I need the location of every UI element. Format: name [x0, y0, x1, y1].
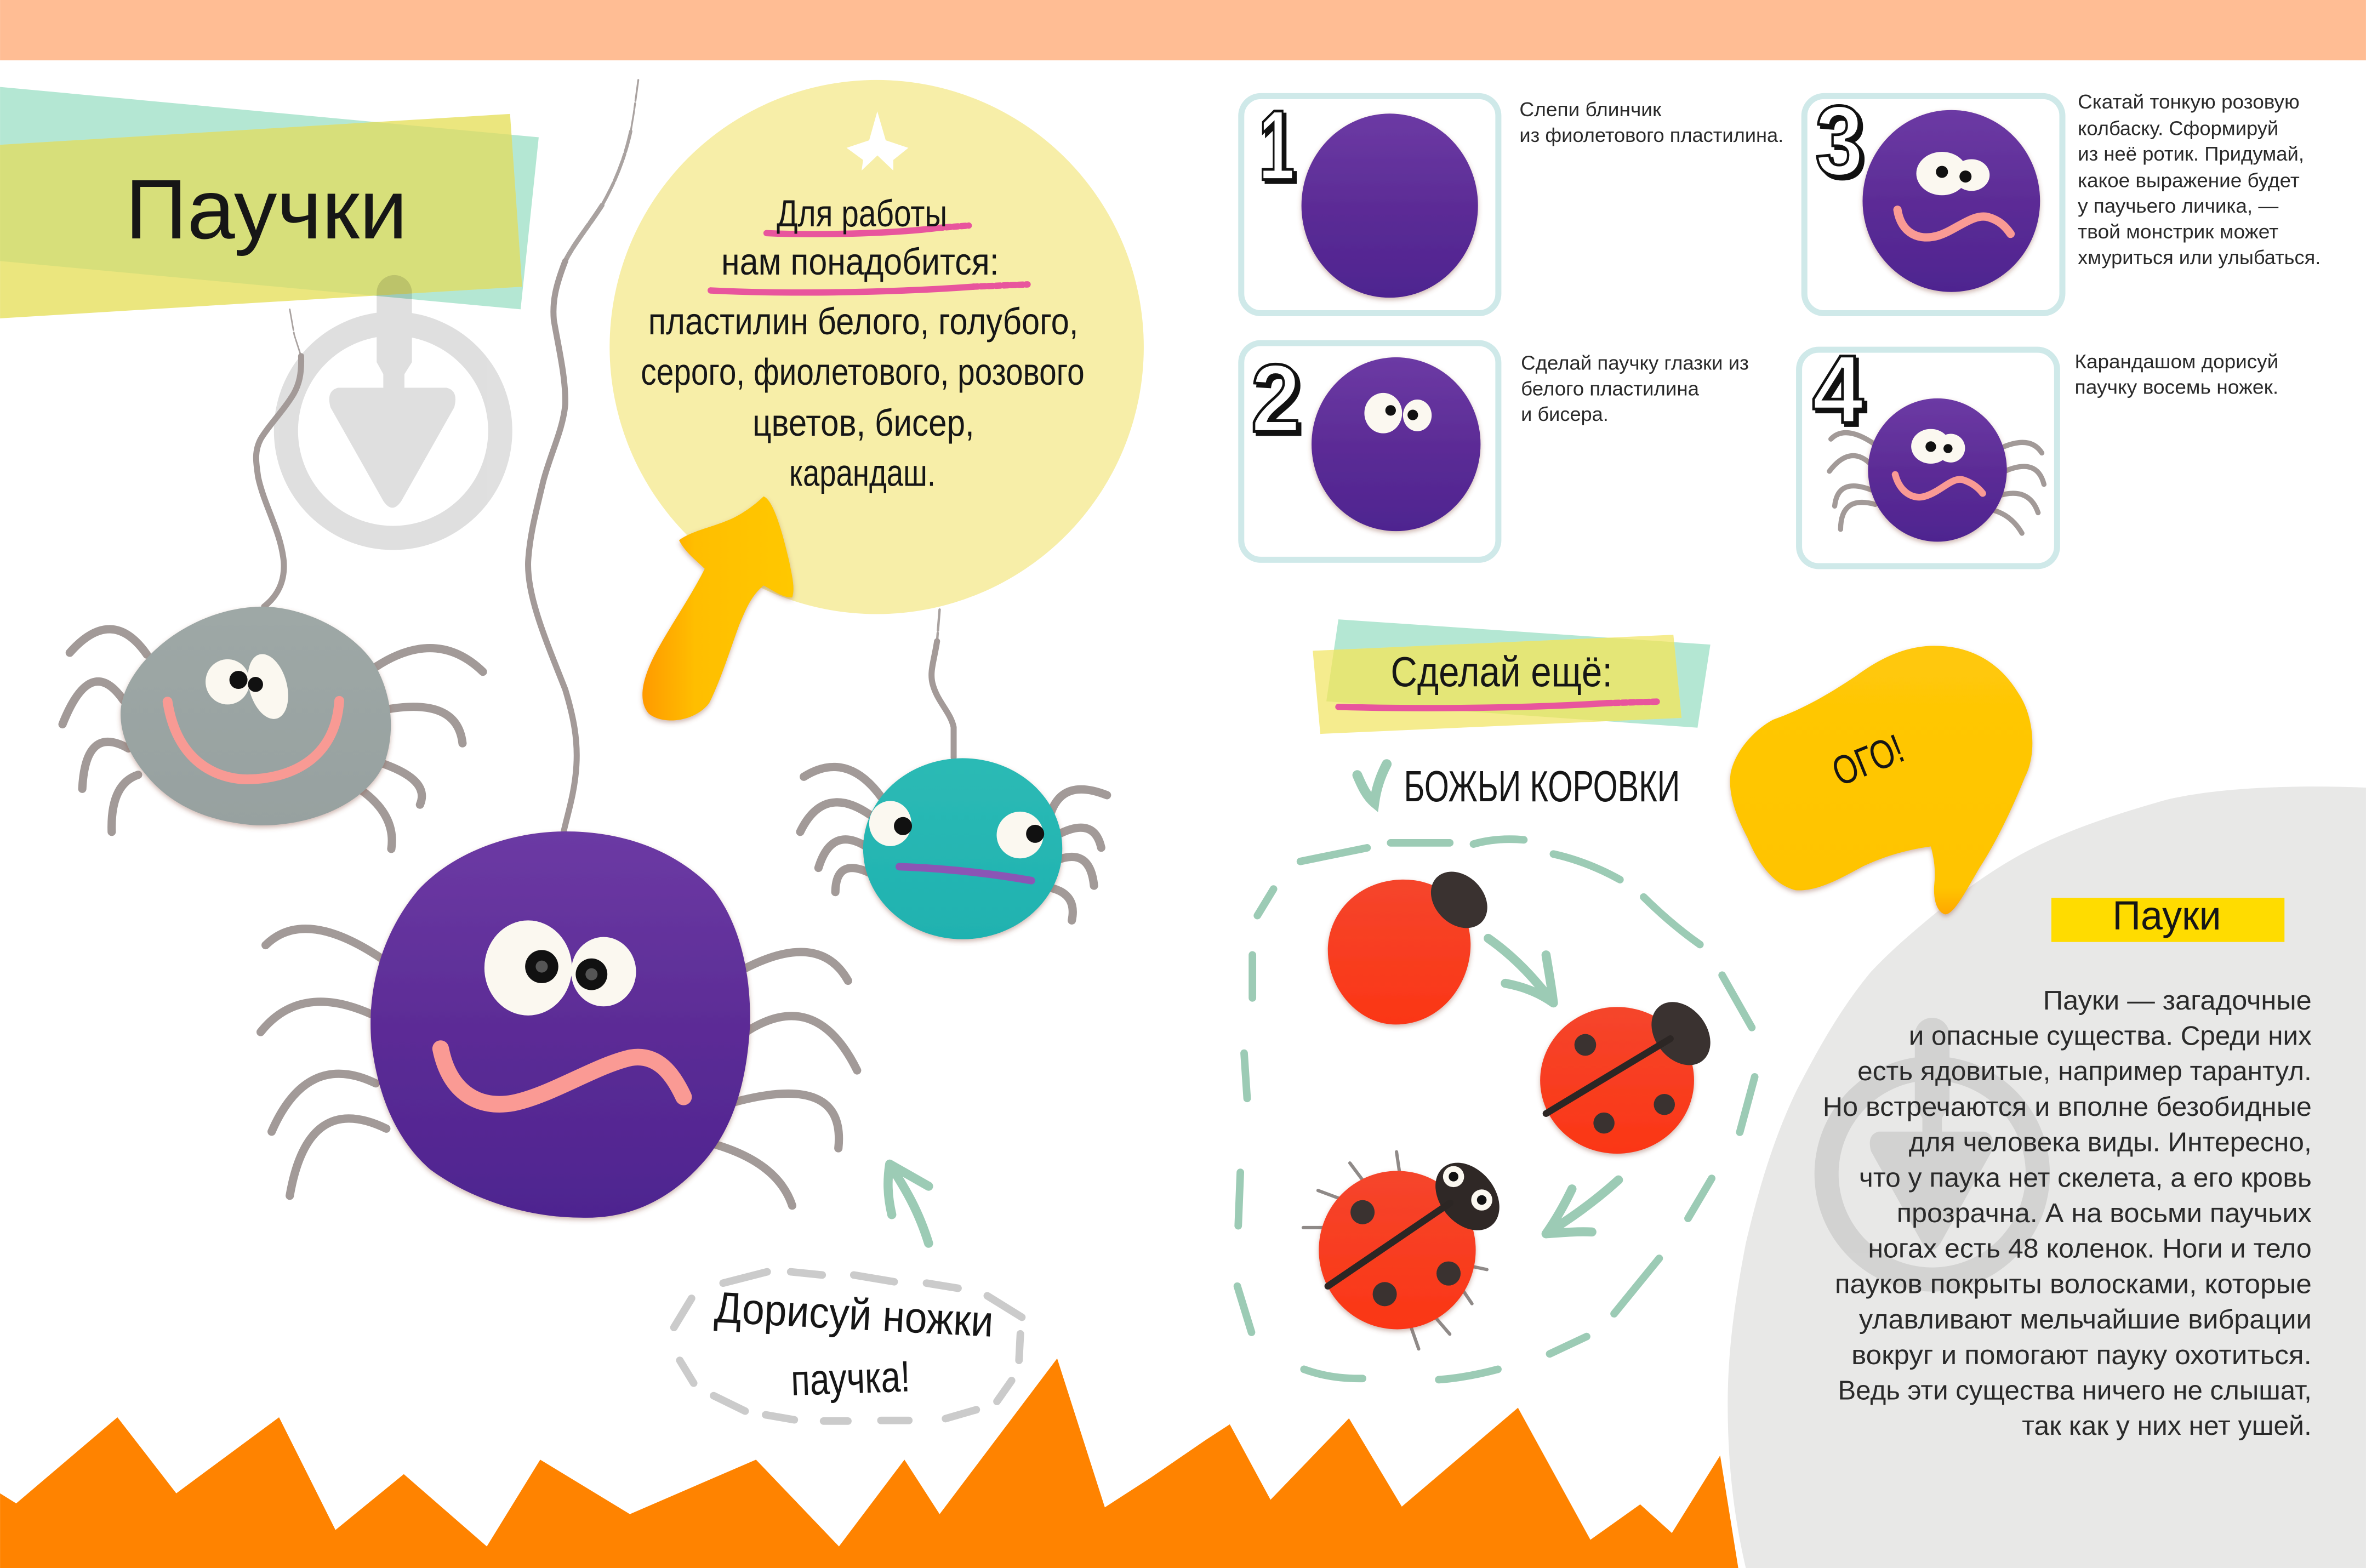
step 2 text: и бисера. [1521, 403, 1609, 425]
text block: spider facts: улавливают мельчайшие вибрации [1859, 1304, 2312, 1335]
ladybug 1 body [1328, 880, 1470, 1024]
step 3 text: из неё ротик. Придумай, [2078, 143, 2304, 165]
dashed ring [1238, 839, 1755, 1379]
panel: step 4 [1799, 335, 2057, 566]
step 3 text: Скатай тонкую розовую [2078, 91, 2300, 113]
thread: teal spider [932, 609, 954, 757]
ribbon underline fade [1607, 702, 1657, 703]
text block: spider facts: прозрачна. А на восьми паучьих [1897, 1198, 2312, 1228]
text block: spider facts: Но встречаются и вполне безобидные [1823, 1091, 2312, 1122]
step 3 text: колбаску. Сформируй [2078, 117, 2278, 139]
ladybug 3 spots [1350, 1200, 1461, 1306]
step 2 disc [1312, 357, 1480, 531]
step 3 eyes [1916, 152, 1989, 195]
teal spider legs [800, 767, 1107, 920]
arrow: green up to spider [888, 1164, 928, 1244]
step 2 number: 2 [1251, 344, 1301, 452]
thread: grey spider [256, 309, 301, 607]
step 3 text [2078, 91, 2321, 269]
panel: materials circle [609, 80, 1144, 614]
pink underline 1 fade [939, 226, 969, 228]
panel: step 3 [1804, 85, 2062, 313]
teal spider mouth [899, 866, 1031, 881]
panel: step 1 [1241, 90, 1498, 313]
purple spider mouth [441, 1048, 683, 1104]
pink underline 2 [711, 287, 973, 293]
materials list line 1: пластилин белого, голубого, [648, 300, 1078, 343]
purple spider legs [261, 929, 857, 1206]
step 3 text: хмуриться или улыбаться. [2078, 247, 2321, 269]
text block: spider facts [1823, 985, 2312, 1441]
grey spider legs [62, 629, 483, 849]
step 4 disc [1868, 398, 2007, 541]
bubble text: ОГО! [1826, 726, 1910, 795]
ladybug 2 line [1546, 1039, 1671, 1114]
text block: spider facts: есть ядовитые, например тарантул. [1857, 1056, 2312, 1086]
title: Паучки [126, 162, 407, 256]
ladybug 2 body [1540, 1007, 1694, 1154]
dashed oval [674, 1272, 1022, 1421]
top band [0, 0, 2366, 60]
ladybugs heading: БОЖЬИ КОРОВКИ [1404, 762, 1680, 811]
ladybug 1 [1328, 860, 1498, 1024]
purple spider eyes [484, 920, 636, 1016]
arrow: yellow clay [642, 497, 794, 720]
step 4 mouth [1895, 475, 1983, 497]
ladybug 3 line [1328, 1203, 1450, 1286]
step 3 mouth [1897, 210, 2011, 237]
step 3 text: у паучьего личика, — [2078, 195, 2278, 217]
step 4 number: 4 [1815, 338, 1867, 446]
grey spider mouth [168, 701, 339, 779]
step 3 text: какое выражение будет [2078, 169, 2300, 191]
materials heading line 1: Для работы [777, 192, 947, 235]
text block: spider facts: Ведь эти существа ничего не слышат, [1838, 1375, 2312, 1405]
grey spider eyes [206, 649, 295, 723]
step 3 disc [1862, 110, 2040, 292]
text block: spider facts: ногах есть 48 коленок. Ноги и тело [1868, 1233, 2312, 1264]
text block: spider facts: для человека виды. Интересно, [1909, 1127, 2312, 1158]
materials heading line 2: нам понадобится: [721, 241, 999, 283]
step 3 number: 3 [1818, 88, 1867, 199]
ladybug 2 spots [1575, 1034, 1675, 1133]
title ribbon [0, 87, 539, 318]
orange zigzag ground [0, 1359, 1738, 1568]
step 2 text: Сделай паучку глазки из [1521, 352, 1749, 374]
callout: draw the legs [674, 1272, 1022, 1421]
text block: spider facts: пауков покрыты волосками, которые [1835, 1268, 2312, 1299]
pink underline 2 fade [973, 284, 1028, 287]
thread: purple spider [528, 80, 638, 831]
step 3 text: твой монстрик может [2078, 221, 2278, 243]
label: spiders [2051, 893, 2284, 942]
step 1 number: 1 [1258, 90, 1295, 201]
step 4 text: Карандашом дорисуй [2075, 351, 2278, 373]
teal spider eyes [869, 801, 1044, 858]
grey fact panel background [1728, 786, 2366, 1568]
speech bubble: wow [1730, 646, 2032, 914]
icon: download watermark on panel [1815, 1018, 2050, 1292]
step 2 eyes [1364, 393, 1432, 434]
ladybug 3 head [1422, 1150, 1513, 1243]
ladybug 1 head [1419, 860, 1498, 939]
step 1 disc [1302, 113, 1478, 298]
step 1 number: 1 [1262, 93, 1298, 204]
ladybug 3 legs [1303, 1152, 1487, 1349]
step 2 text: белого пластилина [1521, 378, 1699, 400]
icon: star [847, 111, 908, 170]
text block: spider facts: Пауки — загадочные [2043, 985, 2312, 1016]
purple spider body [370, 831, 750, 1218]
ladybug 3 [1303, 1150, 1513, 1349]
arrow: ladybug 1 to 2 [1488, 938, 1553, 1003]
icon: download watermark [274, 275, 512, 550]
step 1 text: из фиолетового пластилина. [1519, 124, 1783, 146]
ribbon text: Сделай ещё: [1390, 649, 1612, 696]
step 4 number: 4 [1812, 335, 1863, 443]
materials list line 2: серого, фиолетового, розового [641, 351, 1085, 393]
icon: check mark [1357, 764, 1387, 803]
teal spider body [863, 758, 1062, 939]
pink underline 1 [767, 228, 939, 234]
text block: spider facts: вокруг и помогают пауку охотиться. [1851, 1339, 2312, 1370]
step 4 text [2075, 351, 2278, 398]
materials list line 4: карандаш. [789, 452, 936, 494]
callout text line 2: паучка! [790, 1352, 911, 1405]
ladybug 3 body [1319, 1171, 1476, 1329]
label text: Пауки [2112, 893, 2221, 938]
step 4 legs [1829, 433, 2044, 533]
spider: teal [800, 758, 1107, 939]
panel: step 2 [1241, 343, 1498, 560]
ribbon underline [1338, 703, 1607, 708]
ribbon: make more [1313, 619, 1711, 734]
callout text line 1: Дорисуй ножки [714, 1282, 995, 1346]
step 3 number: 3 [1815, 85, 1863, 196]
materials list line 3: цветов, бисер, [752, 402, 974, 444]
step 2 number: 2 [1254, 347, 1304, 455]
grey spider body [121, 607, 391, 825]
step 1 number [1258, 90, 1298, 204]
spider: large purple [261, 831, 857, 1218]
text block: spider facts: что у паука нет скелета, а его кровь [1859, 1162, 2312, 1193]
step 4 eyes [1911, 429, 1965, 464]
ladybug 3 eyes [1443, 1166, 1492, 1211]
text block: spider facts: и опасные существа. Среди них [1909, 1020, 2312, 1051]
ladybug 2 head [1639, 990, 1723, 1077]
step 2 text [1521, 352, 1749, 425]
ladybug 2 [1540, 990, 1723, 1154]
text block: spider facts: так как у них нет ушей. [2022, 1410, 2312, 1441]
step 1 text: Слепи блинчик [1519, 99, 1662, 121]
arrow: ladybug 2 to 3 [1546, 1180, 1618, 1234]
step 1 text [1519, 99, 1783, 146]
spider: grey [62, 607, 483, 849]
step 4 text: паучку восемь ножек. [2075, 377, 2278, 398]
